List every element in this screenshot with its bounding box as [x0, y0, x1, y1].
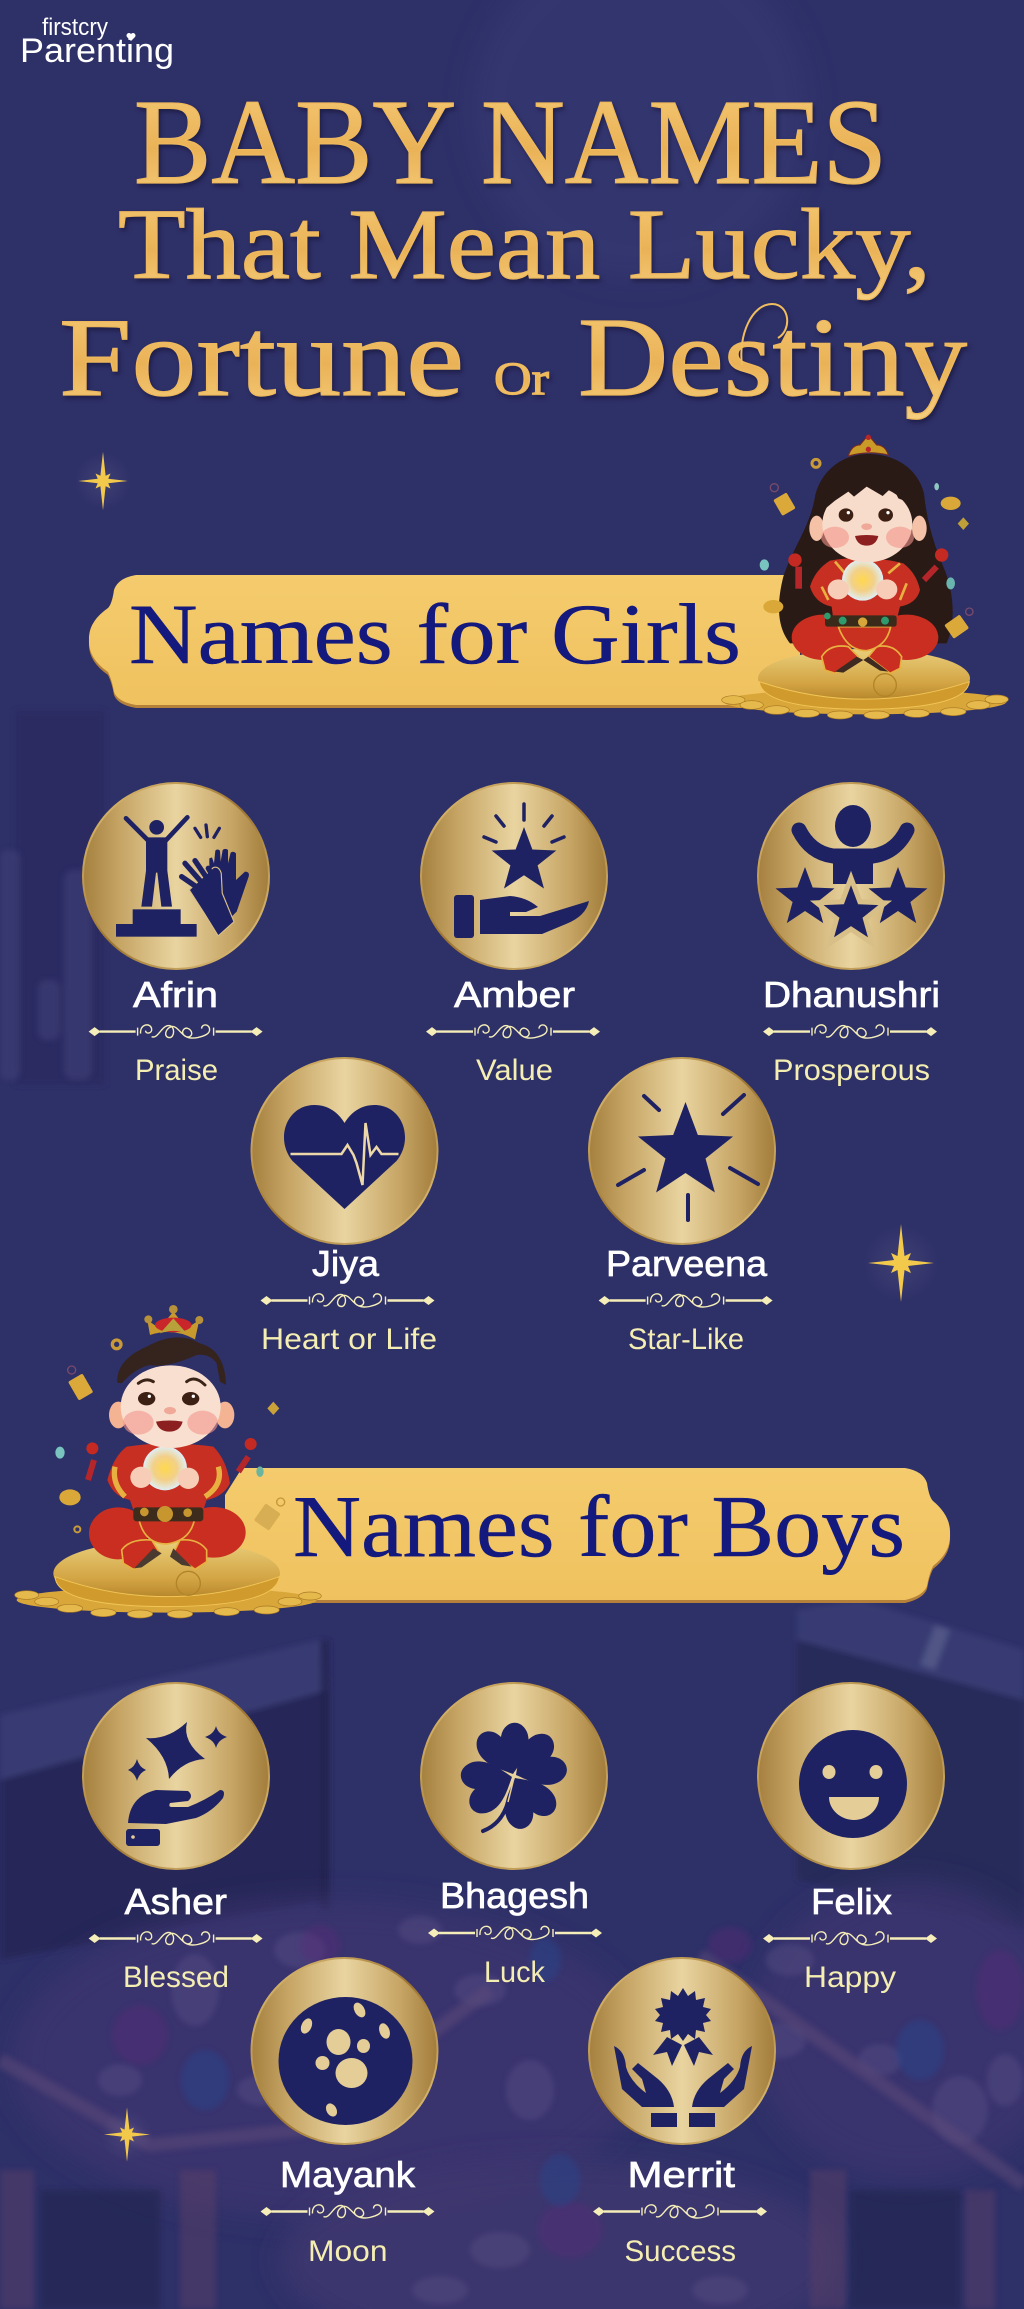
divider ornament: [593, 2205, 767, 2218]
meaning: Blessed: [123, 1961, 229, 1994]
meaning: Success: [624, 2235, 736, 2268]
divider ornament: [763, 1025, 937, 1038]
meaning: Luck: [484, 1956, 546, 1989]
name card: Merrit: [589, 1958, 775, 2268]
name: Felix: [811, 1881, 892, 1922]
right treasure chest: [797, 1600, 1024, 1930]
logo: FirstCry Parenting: [20, 14, 174, 70]
name card: Dhanushri: [758, 783, 944, 1087]
title: Or: [494, 353, 549, 405]
name card: Afrin: [83, 783, 269, 1087]
divider ornament: [260, 2205, 434, 2218]
name: Mayank: [280, 2154, 416, 2195]
meaning: Prosperous: [773, 1054, 930, 1087]
icon: heart with pulse line: [252, 1058, 438, 1244]
title: BABY NAMES: [134, 75, 887, 210]
title: Destiny: [578, 296, 967, 420]
title: That Mean Lucky,: [118, 188, 931, 300]
divider ornament: [89, 1932, 263, 1945]
icon: shining star: [589, 1058, 775, 1244]
logo: FirstCry Parenting: firstcry: [42, 14, 108, 41]
heading: names for boys: Names for Boys: [293, 1479, 905, 1576]
divider ornament: [426, 1025, 600, 1038]
name card: Bhagesh: [421, 1683, 607, 1989]
icon: person on podium with clapping hands: [83, 783, 269, 969]
meaning: Happy: [804, 1961, 896, 1994]
divider ornament: [89, 1025, 263, 1038]
name: Bhagesh: [440, 1875, 589, 1916]
heading: names for girls: Names for Girls: [129, 586, 741, 682]
meaning: Heart or Life: [261, 1323, 437, 1356]
sparkle star bottom left: [100, 2107, 154, 2162]
icon: raised person with three stars: [758, 783, 944, 969]
banner: names for boys: [225, 1468, 950, 1603]
logo: FirstCry Parenting: Parenting: [20, 32, 174, 70]
name card: Parveena: [589, 1058, 775, 1356]
meaning: Praise: [135, 1054, 218, 1087]
name: Asher: [124, 1881, 227, 1922]
name card: Amber: [421, 783, 607, 1087]
illustration: boy on golden cushion: [15, 1305, 321, 1618]
sparkle star right: [863, 1224, 939, 1302]
name card: Mayank: [252, 1958, 438, 2268]
icon: sparkles above hand: [83, 1683, 269, 1869]
name: Jiya: [312, 1243, 380, 1284]
meaning: Star-Like: [628, 1323, 744, 1356]
icon: four-leaf clover: [421, 1683, 607, 1869]
sparkle star top left: [74, 452, 132, 510]
name: Dhanushri: [763, 974, 940, 1015]
name card: Felix: [758, 1683, 944, 1994]
name card: Asher: [83, 1683, 269, 1994]
icon: star above open hand: [421, 783, 607, 969]
banner: names for girls: [89, 575, 800, 708]
title: [59, 75, 967, 420]
name: Afrin: [133, 974, 218, 1015]
name card: Jiya: [252, 1058, 438, 1356]
name: Merrit: [628, 2154, 735, 2195]
name: Parveena: [606, 1243, 768, 1284]
divider ornament: [599, 1294, 773, 1307]
divider ornament: [763, 1932, 937, 1945]
icon: award rosette held by two hands: [589, 1958, 775, 2144]
illustration: girl on golden cushion: [722, 435, 1008, 719]
icon: moon with craters: [252, 1958, 438, 2144]
left treasure chest: [0, 1640, 330, 1960]
divider ornament: [428, 1926, 602, 1939]
meaning: Value: [476, 1054, 553, 1087]
meaning: Moon: [308, 2235, 388, 2268]
name: Amber: [454, 974, 575, 1015]
icon: smiling face: [758, 1683, 944, 1869]
divider ornament: [260, 1294, 434, 1307]
title: Fortune: [59, 296, 464, 420]
